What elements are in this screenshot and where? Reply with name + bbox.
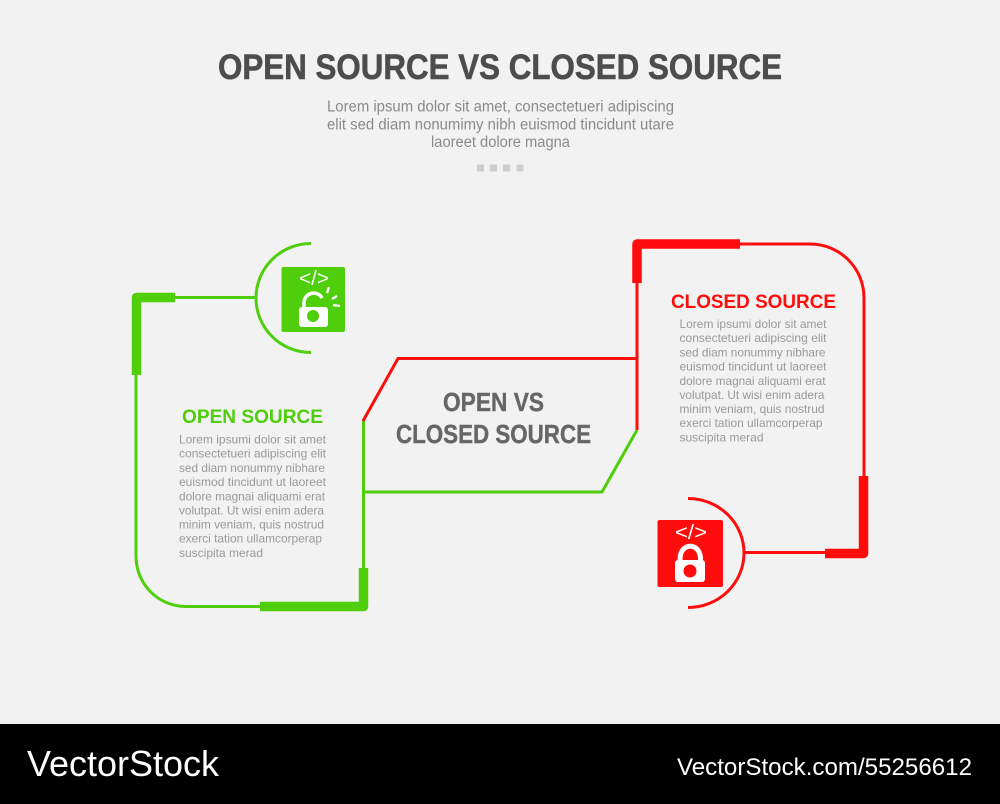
subtitle text block: elit sed diam nonumimy nibh euismod tincidunt utare (327, 116, 674, 134)
text block: open source: exerci tation ullamcorperap (179, 532, 322, 546)
panel: closed source outline (363, 244, 864, 608)
subtitle text block: Lorem ipsum dolor sit amet, consectetueri adipiscing (327, 98, 674, 116)
text block: open source: suscipita merad (179, 546, 263, 560)
text block: closed source: volutpat. Ut wisi enim adera (680, 388, 825, 402)
heading: closed source: CLOSED SOURCE (671, 291, 836, 313)
text block: closed source: Lorem ipsumi dolor sit amet (680, 317, 827, 331)
text block: open source (179, 432, 327, 560)
footer bar (0, 724, 1000, 804)
icon: closed source lock (658, 520, 723, 587)
text block: open source: euismod tincidunt ut laoreet (179, 475, 327, 489)
pagination dots (477, 164, 524, 172)
center label: OPEN VS (443, 387, 544, 417)
text block: open source: sed diam nonummy nibhare (179, 461, 325, 475)
arc around open source icon (256, 244, 311, 352)
text block: open source: volutpat. Ut wisi enim adera (179, 504, 324, 518)
subtitle text block (327, 98, 674, 151)
subtitle text block: laoreet dolore magna (431, 134, 570, 151)
text block: closed source: minim veniam, quis nostrud (680, 402, 824, 416)
heading: open source: OPEN SOURCE (182, 406, 323, 428)
title: OPEN SOURCE VS CLOSED SOURCE (218, 47, 782, 87)
text block: closed source: suscipita merad (680, 430, 764, 444)
text block: open source: Lorem ipsumi dolor sit amet (179, 432, 327, 446)
panel: open source outline (136, 244, 637, 606)
text block: open source: dolore magnai aliquami erat (179, 490, 326, 504)
text block: closed source: exerci tation ullamcorperap (680, 416, 823, 430)
footer bar: VectorStock.com/55256612 (677, 754, 972, 781)
center label: CLOSED SOURCE (396, 419, 591, 449)
text block: open source: consectetueri adipiscing elit (179, 446, 327, 460)
icon: open source lock (282, 267, 345, 332)
text block: closed source: sed diam nonummy nibhare (680, 346, 826, 360)
text block: closed source: consectetueri adipiscing elit (680, 331, 827, 345)
icon: closed source lock: </> (675, 522, 707, 544)
text block: open source: minim veniam, quis nostrud (179, 518, 324, 532)
arc around closed source icon (688, 498, 744, 608)
icon: open source lock: </> (299, 268, 329, 290)
text block: closed source (680, 317, 827, 444)
text block: closed source: euismod tincidunt ut laoreet (680, 360, 827, 374)
footer bar: VectorStock (27, 743, 220, 784)
center label (396, 387, 591, 449)
text block: closed source: dolore magnai aliquami erat (680, 374, 826, 388)
